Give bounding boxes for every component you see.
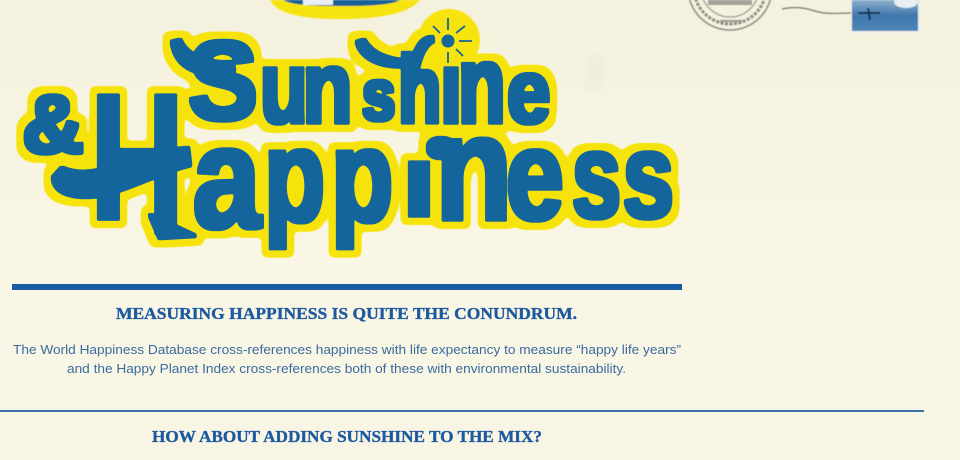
letter: H: H [90,52,184,275]
title: Sunshine & Happiness [22,19,674,275]
sun halo [418,9,480,71]
text block: happiness indexes: The World Happiness Database cross-references happiness with life expectancy to measure “happy life years” [13,342,681,357]
word: Sunshine: n [458,24,506,147]
icon: sun [433,18,472,63]
word: appiness: e [506,103,564,247]
word: Sunshine: s [362,56,395,136]
word: Sunshine: h [398,36,441,143]
word: appiness: a [193,97,262,259]
word: Sunshine: n [302,30,353,145]
word: appiness: n [435,85,513,252]
heading: measuring happiness: MEASURING HAPPINESS IS QUITE THE CONUNDRUM. [116,304,577,323]
swash: S flourish [172,40,234,74]
word: Sunshine: u [260,32,308,145]
text block: happiness indexes: and the Happy Planet Index cross-references both of these with environmental sustainability. [67,361,626,376]
word: appiness [184,130,680,258]
cancellation line [782,8,852,14]
text block: happiness indexes [13,342,681,376]
word: Sunshine: i [440,31,462,145]
stamp [851,0,920,33]
word: appiness: s [623,109,674,243]
swash: h flourish [357,40,412,67]
word: Sunshine: S [188,19,258,144]
word: Sunshine [179,31,558,137]
divider: title rule [12,284,682,290]
divider: section rule [0,410,924,412]
word: appiness: p [264,103,325,249]
word: appiness: s [572,110,621,244]
letter: H [42,86,208,248]
word: appiness: i [401,125,437,237]
postmark [688,0,772,30]
heading: adding sunshine: HOW ABOUT ADDING SUNSHINE TO THE MIX? [152,427,542,446]
swash: h ascender [410,37,433,72]
ampersand: & [22,77,84,170]
badge: top emblem [270,0,420,19]
word: appiness: p [331,103,393,249]
word: Sunshine: e [507,41,550,142]
